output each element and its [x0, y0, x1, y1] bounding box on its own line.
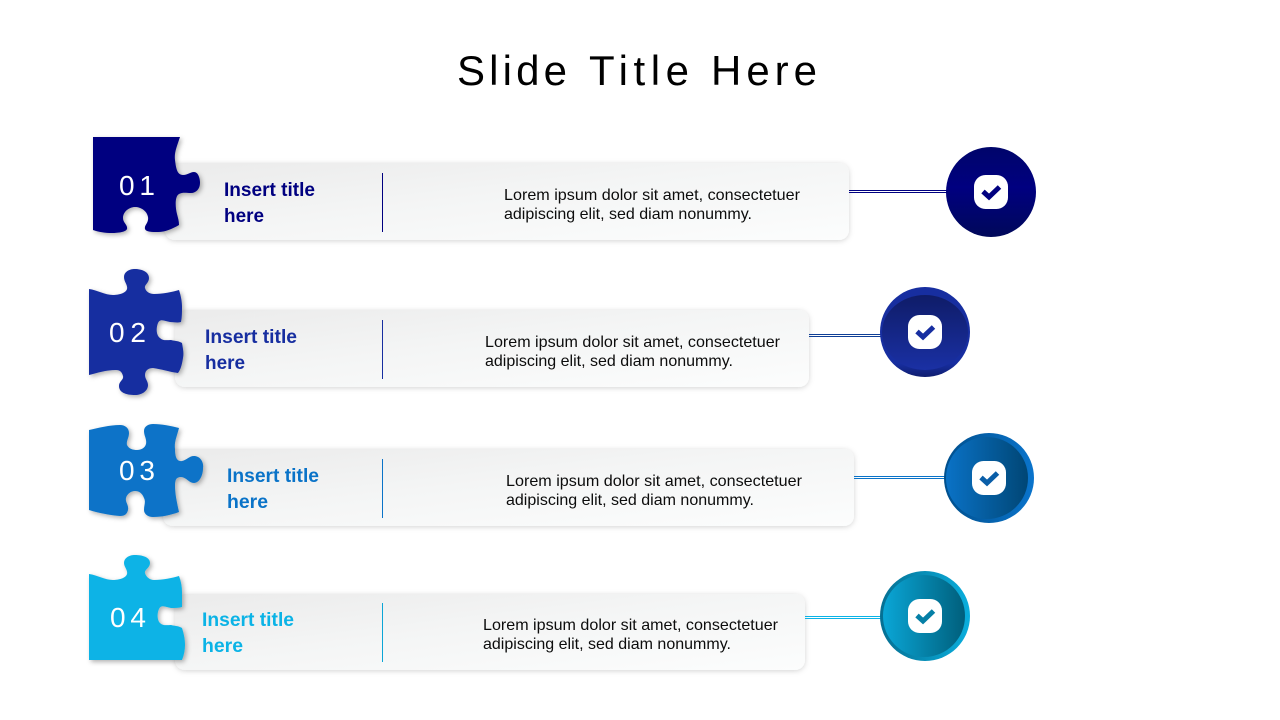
- icon: check badge 4: [880, 571, 970, 661]
- connector 2: [809, 334, 882, 336]
- text block 3: Lorem ipsum dolor sit amet, consectetuer: [506, 473, 803, 490]
- row 2: [89, 269, 970, 395]
- row 3: [89, 424, 1034, 526]
- icon: check badge 3: [944, 433, 1034, 523]
- heading 3: here: [227, 491, 268, 513]
- icon: check badge 2: [880, 287, 970, 377]
- heading 4: here: [202, 635, 243, 657]
- divider 1: [382, 173, 383, 232]
- connector 1: [849, 190, 948, 192]
- title: Slide: [457, 47, 567, 94]
- connector 4: [805, 616, 882, 618]
- puzzle piece 03: [89, 424, 203, 517]
- title: Here: [711, 47, 817, 94]
- text block 4: adipiscing elit, sed diam nonummy.: [483, 636, 731, 653]
- text block 4: Lorem ipsum dolor sit amet, consectetuer: [483, 617, 779, 634]
- connector 3: [854, 476, 946, 478]
- panel: row 2 card: [175, 310, 809, 387]
- heading 2: here: [205, 352, 245, 374]
- puzzle piece 04: [89, 555, 185, 660]
- divider 2: [382, 320, 383, 379]
- text block 1: Lorem ipsum dolor sit amet, consectetuer: [504, 187, 801, 204]
- icon: check badge 1: [946, 147, 1036, 237]
- row 1: [93, 137, 1036, 240]
- text block 1: adipiscing elit, sed diam nonummy.: [504, 206, 752, 223]
- title: Title: [589, 47, 689, 94]
- panel: row 4 card: [175, 594, 805, 670]
- text block 2: adipiscing elit, sed diam nonummy.: [485, 353, 733, 370]
- panel: row 3 card: [163, 449, 854, 526]
- heading 4: Insert title: [202, 609, 294, 631]
- heading 1: Insert title: [224, 179, 315, 201]
- heading 2: Insert title: [205, 326, 297, 348]
- row 4: [89, 555, 970, 670]
- heading 3: Insert title: [227, 465, 319, 487]
- divider 4: [382, 603, 383, 662]
- puzzle piece 02: [89, 269, 183, 395]
- divider 3: [382, 459, 383, 518]
- text block 2: Lorem ipsum dolor sit amet, consectetuer: [485, 334, 781, 351]
- number 02: 02: [109, 317, 146, 348]
- text block 3: adipiscing elit, sed diam nonummy.: [506, 492, 754, 509]
- number 03: 03: [119, 455, 155, 486]
- panel: row 1 card: [165, 163, 849, 240]
- puzzle piece 01: [93, 137, 200, 233]
- number 01: 01: [119, 170, 155, 201]
- heading 1: here: [224, 205, 264, 227]
- number 04: 04: [110, 602, 146, 633]
